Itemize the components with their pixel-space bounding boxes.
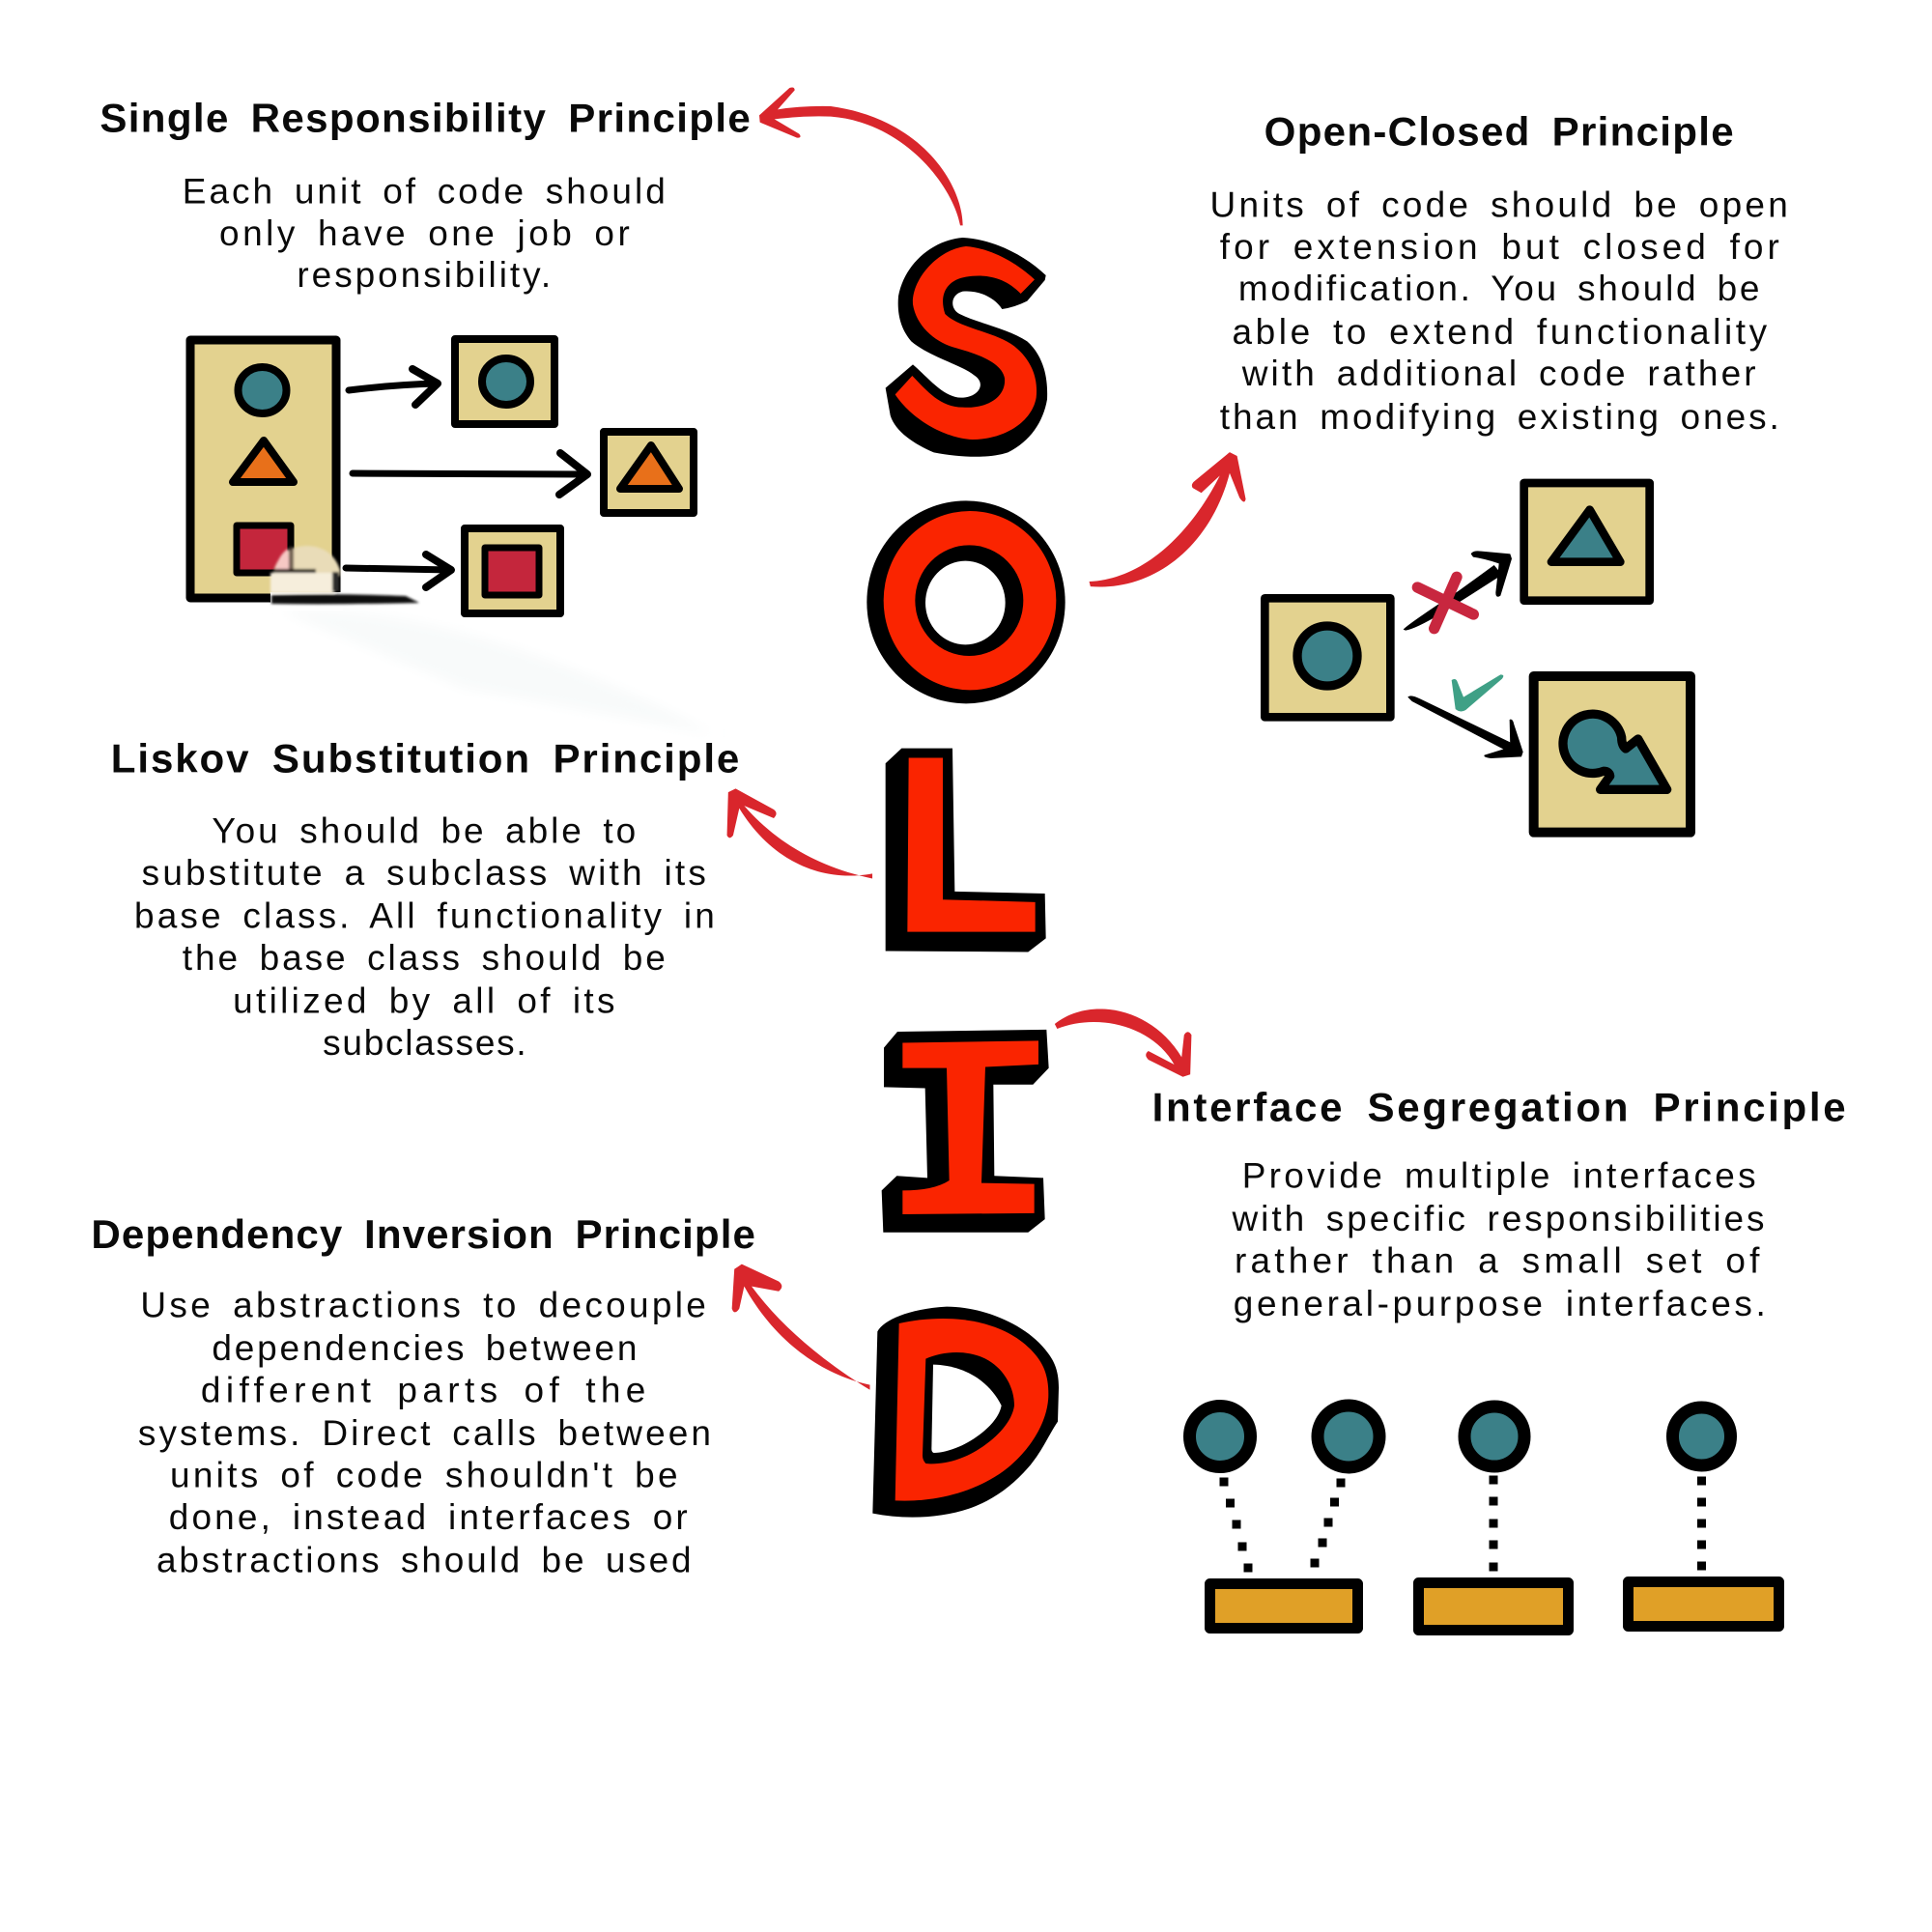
panel: dependency inversion principle (91, 1211, 755, 1580)
text block: open-closed description: for extension but closed for (1220, 227, 1779, 267)
icon: interface bars (1209, 1582, 1779, 1631)
text block: dependency inversion description: done, instead interfaces or (169, 1497, 688, 1537)
icon: green check (1452, 674, 1503, 711)
text block: interface segregation description: Provide multiple interfaces (1242, 1156, 1756, 1196)
text block: interface segregation description: with specific responsibilities (1232, 1199, 1765, 1238)
diagram: extension versus modification (1264, 483, 1690, 833)
letter D (872, 1307, 1059, 1518)
text block: single responsibility description: Each unit of code should (183, 171, 666, 211)
text block: dependency inversion description (138, 1286, 711, 1580)
letter O (867, 500, 1065, 703)
text block: dependency inversion description: systems. Direct calls between (138, 1413, 711, 1453)
text block: liskov description: You should be able to (212, 810, 636, 850)
text block: dependency inversion description: units of code shouldn't be (170, 1456, 678, 1495)
text block: dependency inversion description: different parts of the (201, 1371, 645, 1410)
text block: single responsibility description: only have one job or (219, 213, 630, 253)
icon: client circles (1190, 1406, 1731, 1467)
text block: open-closed description (1210, 185, 1788, 437)
letter I (882, 1030, 1049, 1233)
text block: liskov description: substitute a subclass with its (142, 853, 706, 893)
text block: liskov description: utilized by all of its (233, 980, 614, 1020)
title: SOLID vertical letters (867, 238, 1065, 1518)
heading: interface segregation: Interface Segregation Principle (1152, 1085, 1846, 1130)
arrow: S to single responsibility (759, 88, 963, 225)
icon: circle source box (1264, 598, 1390, 717)
text block: open-closed description: able to extend functionality (1233, 312, 1768, 352)
panel: open-closed principle (1210, 109, 1788, 833)
text block: interface segregation description (1232, 1156, 1766, 1323)
text block: dependency inversion description: abstractions should be used (156, 1541, 692, 1580)
heading: open-closed: Open-Closed Principle (1264, 109, 1734, 155)
heading: single responsibility: Single Responsibility Principle (99, 95, 751, 140)
text block: interface segregation description: rather than a small set of (1235, 1241, 1760, 1281)
text block: liskov description: the base class should be (183, 938, 666, 978)
icon: triangle box (604, 432, 694, 513)
arrow: L to liskov (727, 788, 872, 878)
panel: interface segregation principle (1152, 1085, 1846, 1631)
heading: liskov substitution: Liskov Substitution Principle (111, 736, 739, 781)
text block: open-closed description: Units of code should be open (1210, 185, 1788, 224)
diagram: clients and interfaces (1190, 1406, 1779, 1631)
arrow: to combined box (1407, 696, 1523, 758)
letter L (886, 749, 1046, 952)
arrow: O to open-closed (1090, 452, 1246, 587)
text block: open-closed description: modification. You should be (1238, 269, 1759, 308)
text block: open-closed description: than modifying existing ones. (1220, 397, 1779, 437)
panel: liskov substitution principle (111, 736, 739, 1063)
text block: dependency inversion description: Use abstractions to decouple (140, 1286, 706, 1325)
icon: combined shape box (1534, 676, 1690, 833)
icon: red cross (1417, 577, 1473, 629)
icon: circle box (455, 339, 554, 424)
icon: triangle box (1524, 483, 1650, 601)
text block: liskov description: base class. All functionality in (134, 895, 715, 935)
arrow: D to dependency inversion (732, 1264, 870, 1390)
heading: dependency inversion: Dependency Inversion Principle (91, 1211, 755, 1257)
text block: liskov description (134, 810, 715, 1063)
dotted connectors (1219, 1476, 1706, 1573)
icon: square box (465, 528, 560, 613)
text block: open-closed description: with additional code rather (1241, 354, 1756, 393)
text block: interface segregation description: general-purpose interfaces. (1234, 1284, 1766, 1323)
letter S (886, 238, 1047, 457)
arrow: to triangle box (353, 453, 587, 495)
arrow: to triangle box (1404, 551, 1512, 631)
text block: single responsibility description: responsibility. (297, 255, 551, 295)
diagram: one class split into three (190, 339, 715, 734)
arrow: I to interface segregation (1055, 1009, 1191, 1077)
red arrows from letters to principles (727, 88, 1246, 1390)
panel: single responsibility principle (99, 95, 751, 734)
text block: dependency inversion description: dependencies between (212, 1328, 637, 1368)
smudge on diagram corner (270, 546, 715, 734)
text block: liskov description: subclasses. (323, 1023, 526, 1063)
arrow: to square box (346, 554, 451, 587)
arrow: to circle box (349, 369, 438, 405)
icon: large class box (190, 340, 336, 598)
text block: single responsibility description (183, 171, 666, 295)
